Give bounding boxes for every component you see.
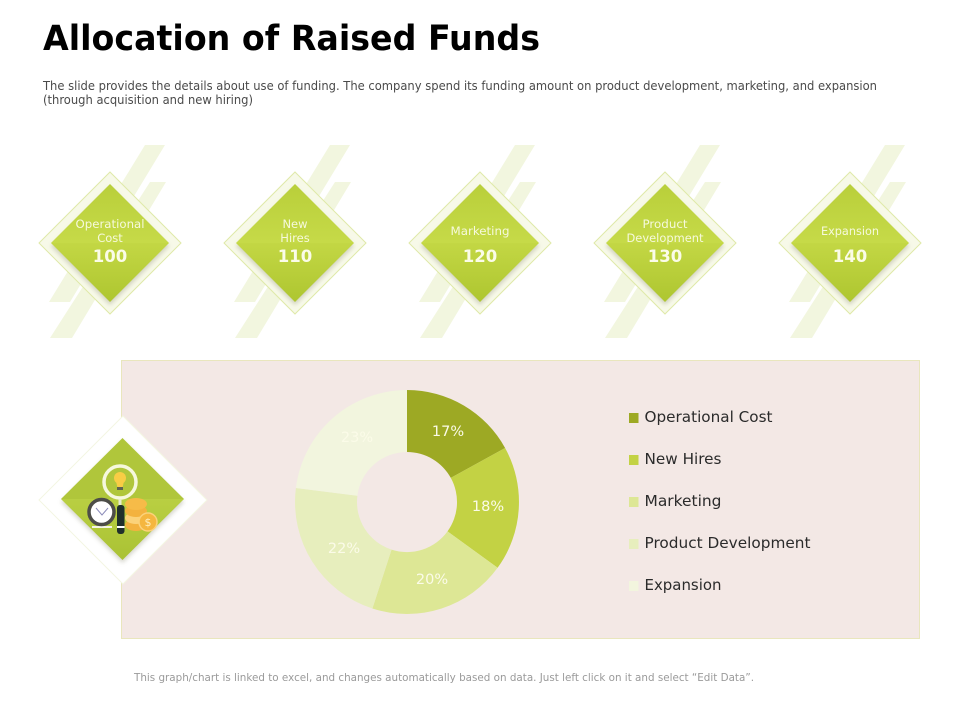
label: 23%: 23% [341,430,373,446]
description: The slide provides the details about use of funding. The company spend its funding amount on product development, marketing, and expansion [42,79,877,93]
card: Marketing: 120 [463,247,497,266]
card: Marketing: Marketing [450,224,510,238]
icon: funding diamond [39,416,207,584]
legend: Operational Cost: Operational Cost [644,408,772,426]
card: Product Development: 130 [648,247,682,266]
card: New Hires: New [282,217,308,231]
icon: magnifier with bulb [104,466,136,534]
panel: chart background [122,360,920,638]
card: Product Development: Product [642,217,688,231]
card: Expansion [779,145,921,338]
icon: coins [125,498,157,531]
icon: clock [89,500,114,528]
card: Expansion: 140 [833,247,867,266]
card: New Hires: Hires [280,231,310,245]
legend [629,408,810,594]
description [42,79,877,107]
card: Operational Cost [39,145,181,338]
card: Operational Cost: Operational [76,217,144,231]
icon: coins: $ [144,516,152,529]
card: Expansion: Expansion [821,224,879,238]
donut chart [295,390,519,614]
legend: Marketing: Marketing [644,492,722,510]
legend: Expansion: Expansion [644,576,722,594]
card: Product Development: Development [626,231,704,245]
card: Operational Cost: Cost [97,231,123,245]
label: 20%: 20% [416,572,448,588]
card: New Hires [224,145,366,338]
description: (through acquisition and new hiring) [43,93,253,107]
label: 17%: 17% [432,424,464,440]
card: Product Development [594,145,736,338]
legend: New Hires: New Hires [644,450,722,468]
footnote: This graph/chart is linked to excel, and changes automatically based on data. Just left click on it and select “Edit Data”. [133,672,754,684]
card: New Hires: 110 [278,247,312,266]
card: Operational Cost: 100 [93,247,127,266]
card: Marketing [409,145,551,338]
legend: Product Development: Product Development [644,534,810,552]
label: 22%: 22% [328,541,360,557]
label: 18%: 18% [472,499,504,515]
title: Allocation of Raised Funds [43,19,540,59]
